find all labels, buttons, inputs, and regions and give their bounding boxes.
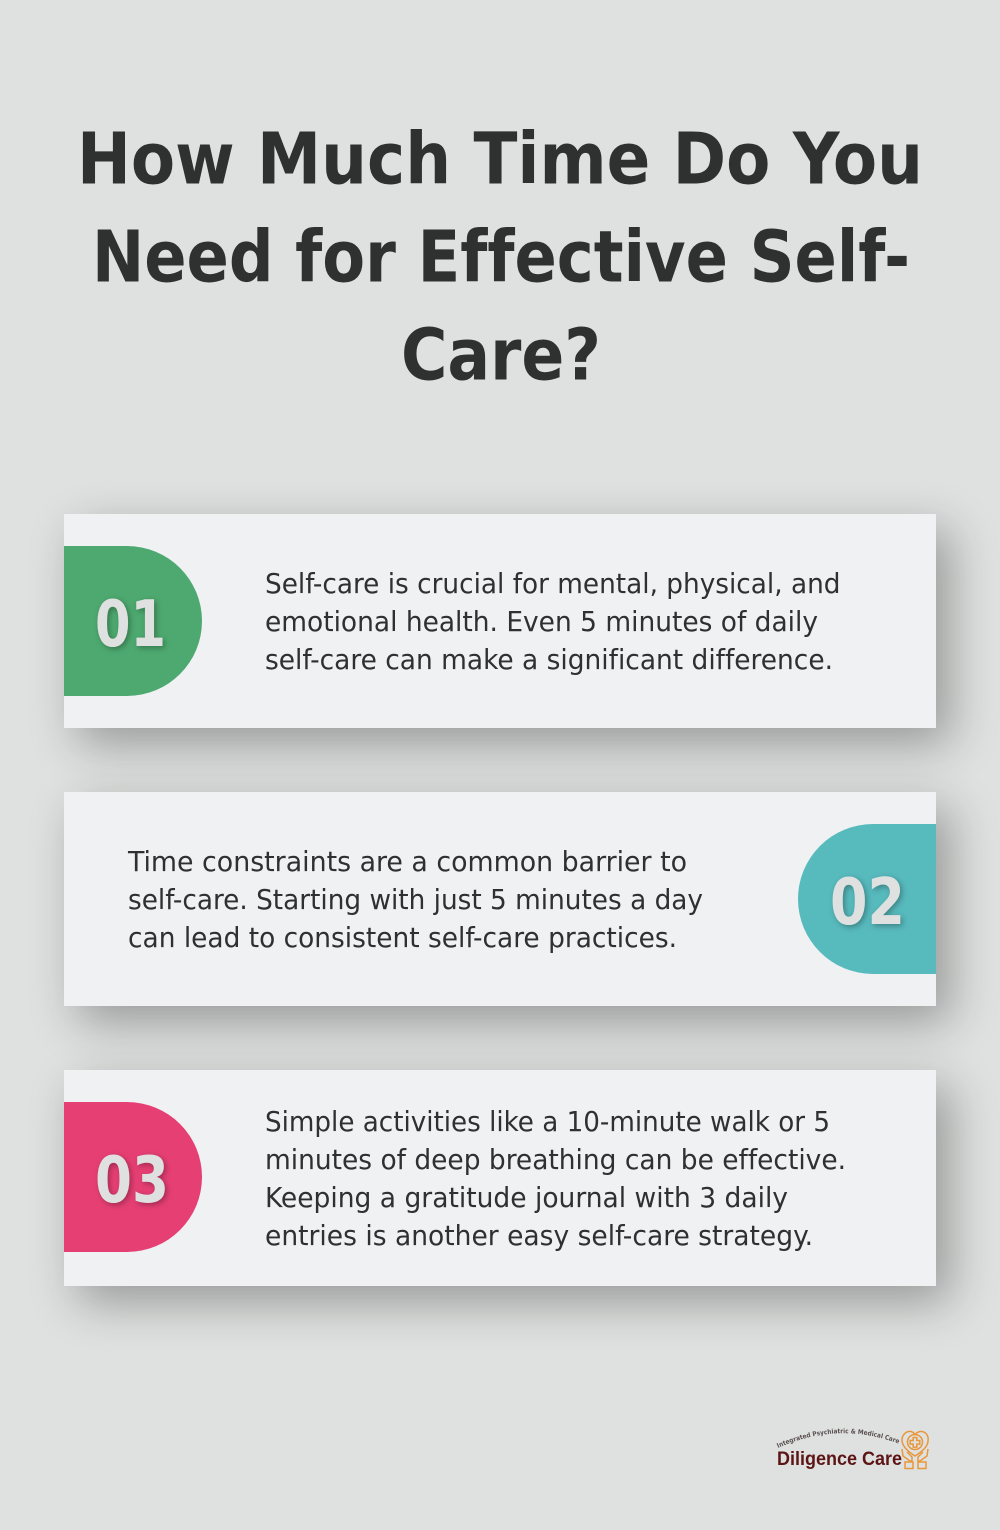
badge: 01 xyxy=(64,546,202,696)
text: step 01 description: self-care can make a significant difference. xyxy=(265,644,833,676)
badge: 01: 01 xyxy=(95,588,166,662)
text: step 02 description xyxy=(127,846,703,954)
logo: Diligence Care xyxy=(776,1428,929,1470)
text: step 01 description: Self-care is crucial for mental, physical, and xyxy=(265,568,840,600)
badge: 03: 03 xyxy=(95,1144,169,1218)
logo icon: heart held by hands xyxy=(902,1431,928,1468)
title: Need for Effective Self- xyxy=(92,216,910,298)
title xyxy=(77,118,923,396)
logo wordmark: Diligence Care xyxy=(777,1449,902,1470)
text: step 03 description: Keeping a gratitude journal with 3 daily xyxy=(265,1182,788,1214)
text: step 02 description: Time constraints are a common barrier to xyxy=(127,846,687,878)
panel: step 02 xyxy=(64,792,936,1006)
badge: 02: 02 xyxy=(830,866,905,940)
text: step 03 description: entries is another easy self-care strategy. xyxy=(265,1220,813,1252)
text: step 03 description: Simple activities like a 10-minute walk or 5 xyxy=(265,1106,830,1138)
text: step 01 description: emotional health. Even 5 minutes of daily xyxy=(265,606,818,638)
text: step 03 description: minutes of deep breathing can be effective. xyxy=(265,1144,846,1176)
badge: 02 xyxy=(798,824,936,974)
panel: step 03 xyxy=(64,1070,936,1286)
text: step 01 description xyxy=(265,568,840,676)
logo tagline: Integrated Psychiatric & Medical Care xyxy=(776,1428,900,1448)
title: Care? xyxy=(401,314,601,396)
badge: 03 xyxy=(64,1102,202,1252)
title: How Much Time Do You xyxy=(77,118,923,200)
text: step 02 description: self-care. Starting with just 5 minutes a day xyxy=(128,884,703,916)
text: step 03 description xyxy=(265,1106,846,1252)
text: step 02 description: can lead to consistent self-care practices. xyxy=(128,922,677,954)
panel: step 01 xyxy=(64,514,936,728)
